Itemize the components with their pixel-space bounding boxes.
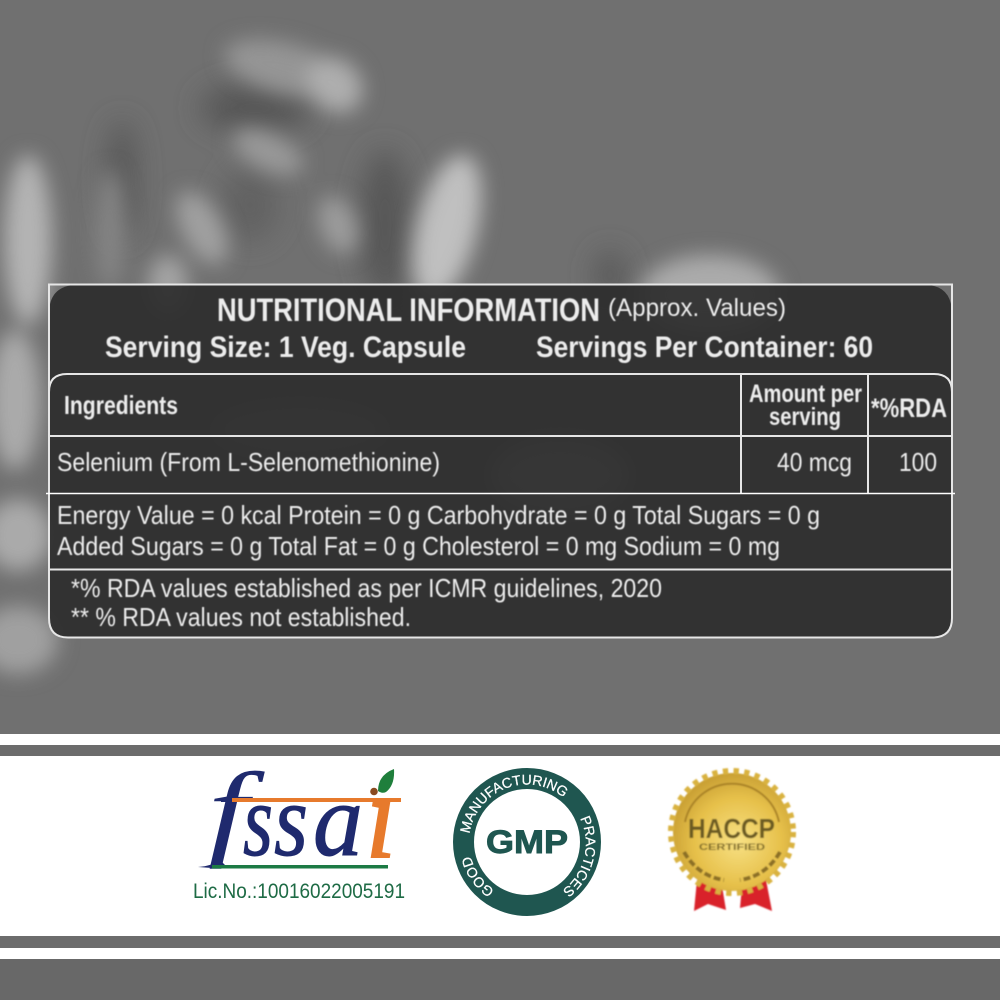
inner ring <box>685 784 779 822</box>
fssai lettering: s <box>274 763 308 878</box>
orange and navy bar <box>221 798 233 802</box>
column header: RDA: *%RDA <box>871 393 947 423</box>
ring text: GOOD <box>462 858 492 896</box>
fssai lettering: f <box>208 752 265 870</box>
badge: HACCP <box>671 771 793 911</box>
column header: amount per serving <box>749 380 862 431</box>
column header: ingredients: Ingredients <box>64 390 178 420</box>
fssai lettering: a <box>313 763 363 878</box>
navy swoosh <box>198 860 226 868</box>
energy values: Energy Value = 0 kcal Protein = 0 g Carbohydrate = 0 g Total Sugars = 0 g <box>57 500 820 530</box>
leaf <box>378 769 394 793</box>
ring text <box>460 774 596 896</box>
panel background <box>49 285 952 638</box>
servings per container: Servings Per Container: 60 <box>536 331 873 364</box>
ring text: MANUFACTURING <box>460 774 568 833</box>
laurels <box>684 852 780 880</box>
ribbons <box>694 880 772 911</box>
footnotes: ** % RDA values not established. <box>71 602 411 632</box>
title: NUTRITIONAL INFORMATION <box>217 292 600 328</box>
serving size: Serving Size: 1 Veg. Capsule <box>105 331 466 364</box>
column header: amount per serving: serving <box>769 403 841 431</box>
energy values: Added Sugars = 0 g Total Fat = 0 g Cholesterol = 0 mg Sodium = 0 mg <box>57 531 780 561</box>
fssai lettering: s <box>243 763 273 878</box>
HACCP label: HACCP <box>688 813 775 844</box>
footnotes <box>71 573 662 632</box>
ingredient name: Selenium (From L-Selenomethionine) <box>57 447 440 477</box>
RDA value: 100 <box>899 447 937 477</box>
column header: amount per serving: Amount per <box>749 380 862 408</box>
fruit <box>370 788 378 795</box>
ring text: PRACTICES <box>564 816 596 896</box>
GMP label: GMP <box>486 824 568 860</box>
gold seal <box>673 773 791 891</box>
panel: nutrition table <box>46 284 955 638</box>
blurred capsule photo background <box>0 0 1000 734</box>
footnotes: *% RDA values established as per ICMR guidelines, 2020 <box>71 573 662 603</box>
licence number: Lic.No.:10016022005191 <box>193 880 405 903</box>
amount value: 40 mcg <box>777 447 852 477</box>
fssai lettering <box>208 752 396 883</box>
panel border and table grid <box>46 284 955 638</box>
logo: fssai <box>193 752 405 903</box>
white strip and grey bands <box>0 734 1000 1000</box>
table text <box>57 292 947 632</box>
certified label: CERTIFIED <box>699 842 766 852</box>
title note: (Approx. Values) <box>608 294 786 322</box>
green bar <box>212 865 388 868</box>
fssai lettering: ı <box>366 752 396 883</box>
badge: GMP <box>453 768 601 916</box>
energy values <box>57 500 820 561</box>
ring <box>464 778 590 906</box>
